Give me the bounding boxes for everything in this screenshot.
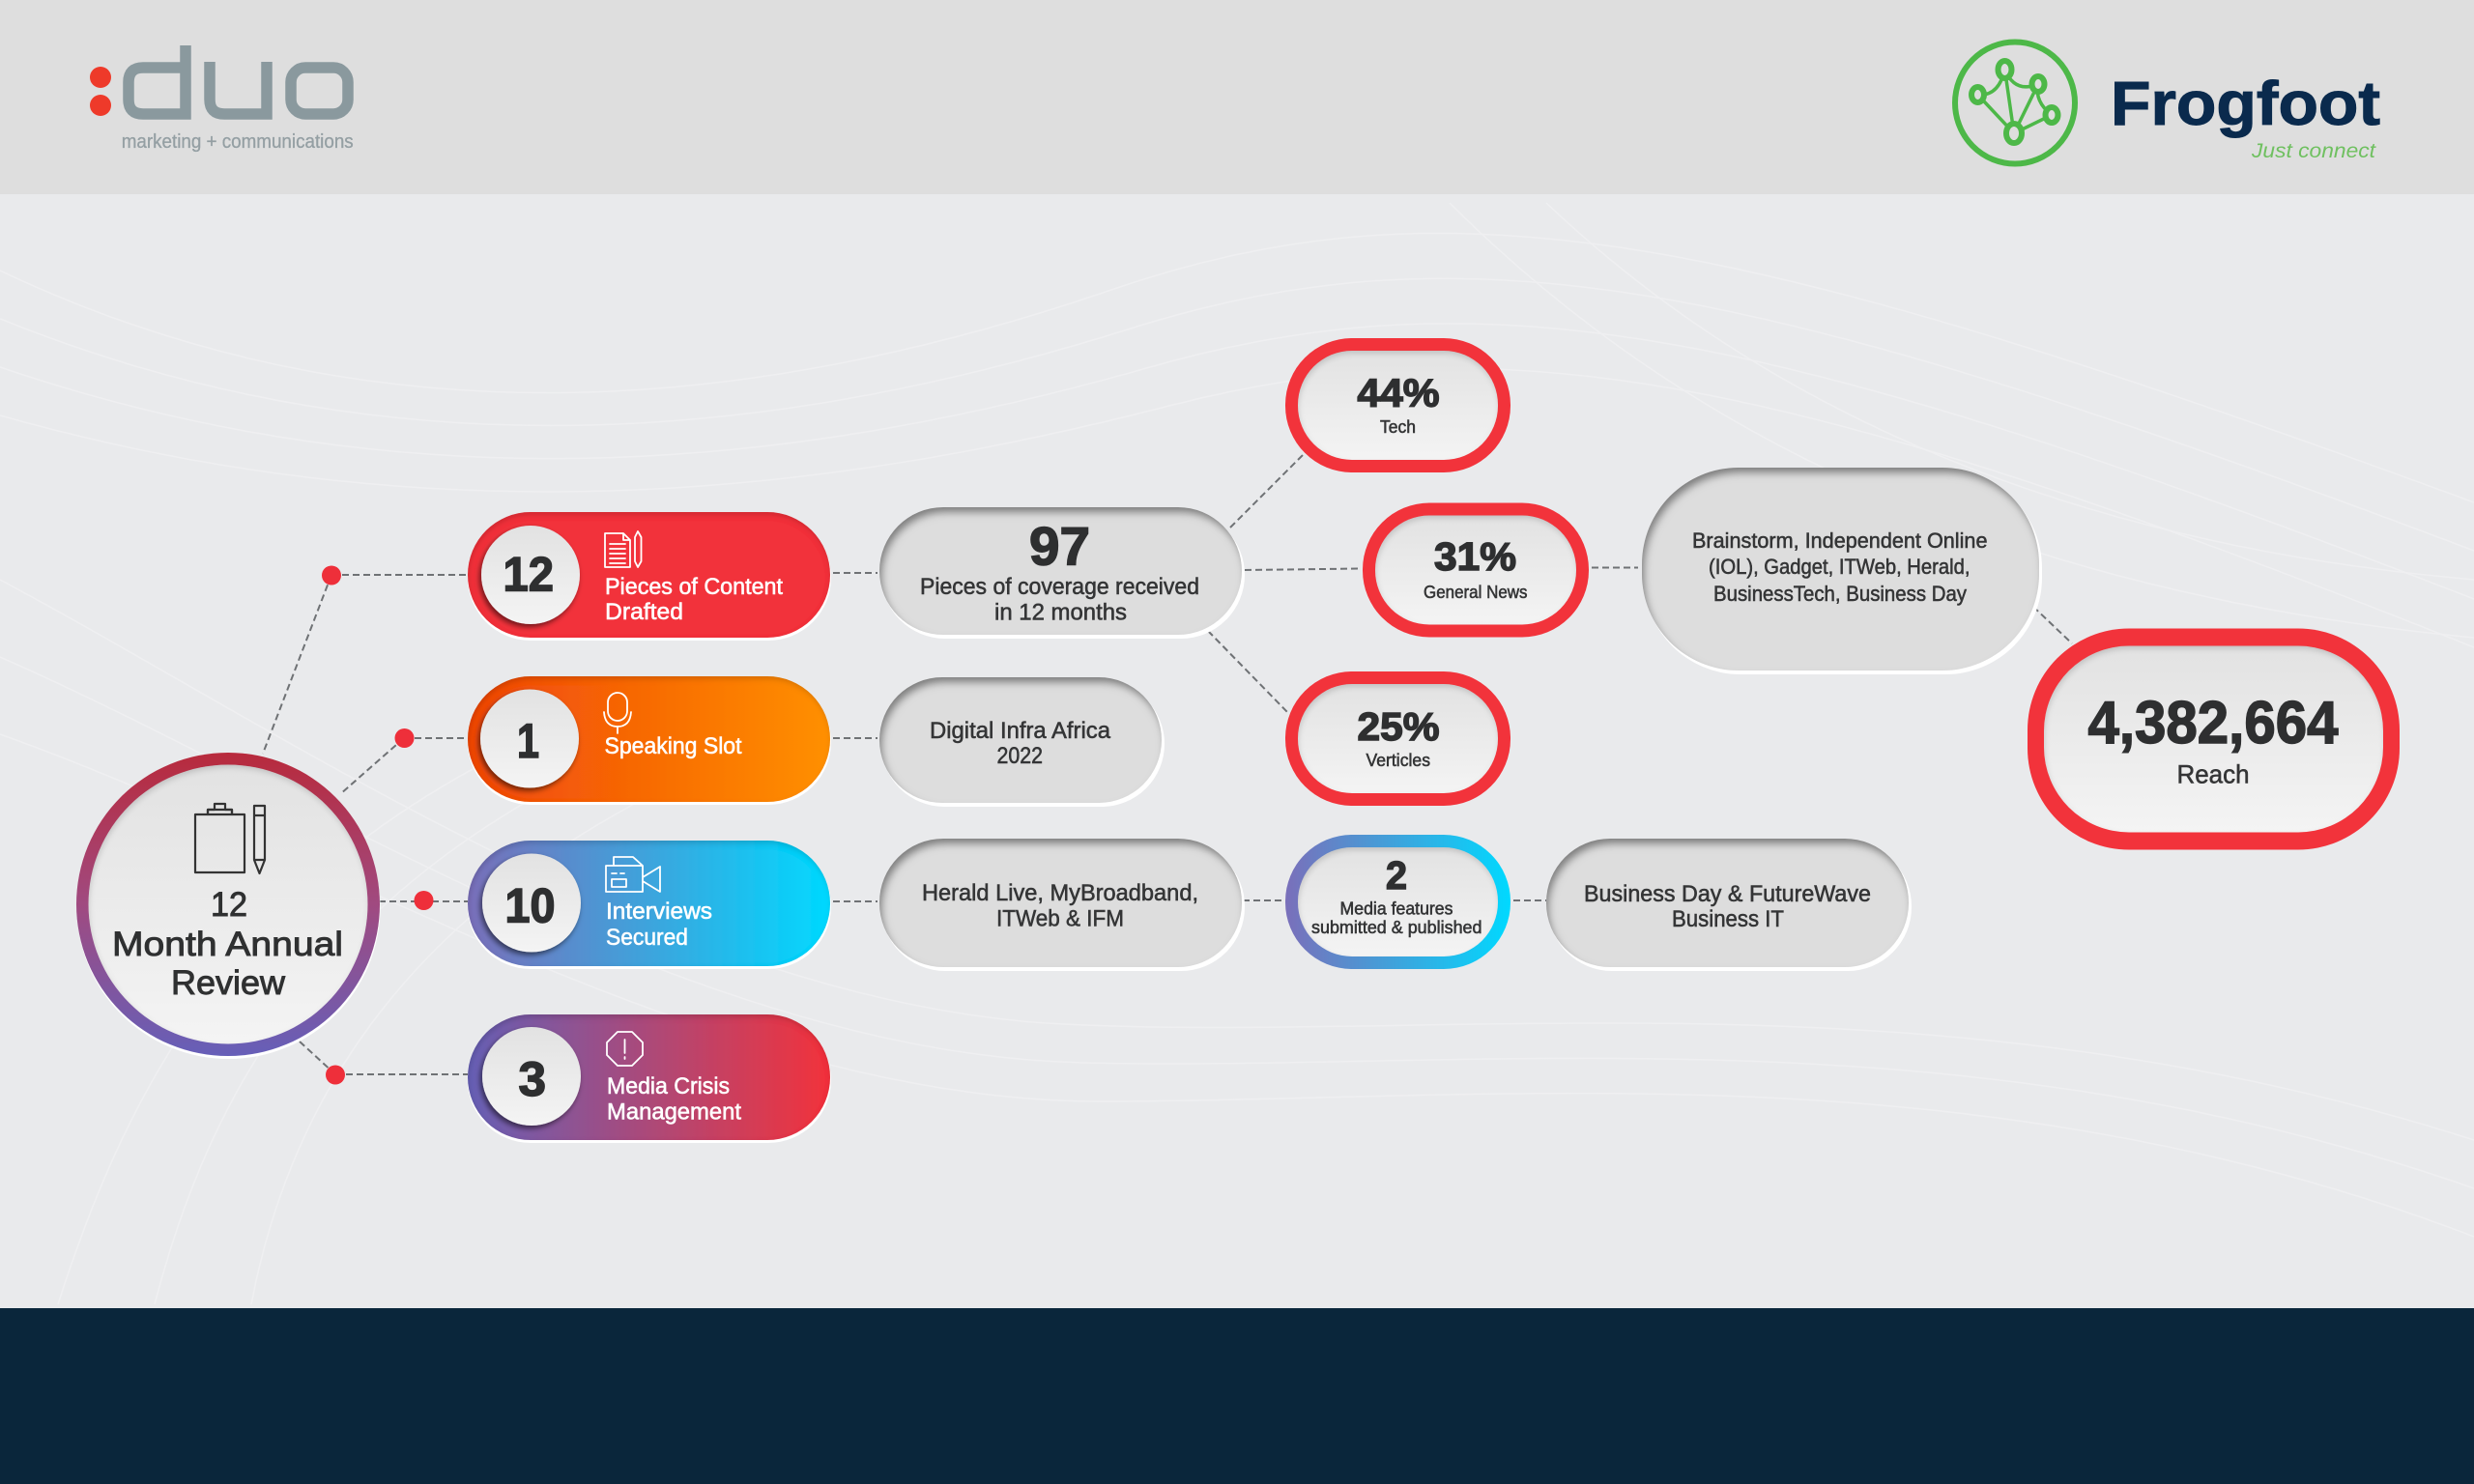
- central circle: 12 Month Annual Review: Review: [171, 964, 286, 1002]
- stat: 25% Verticles: 25%: [1357, 704, 1440, 749]
- panel: 97 pieces of coverage: in 12 months: [994, 599, 1127, 626]
- stat: 44% Tech: Tech: [1380, 417, 1416, 437]
- stat: 25% Verticles: [1285, 671, 1510, 806]
- footer band: [0, 1308, 2474, 1484]
- panel: Business Day and FutureWave: Business Day & FutureWave: [1584, 881, 1871, 907]
- stat: 2 Media features: [1285, 835, 1510, 969]
- pill: 10 Interviews Secured: 10: [504, 879, 555, 933]
- icon: video camera: [606, 857, 660, 892]
- stat: 2 Media features: 2: [1386, 853, 1407, 898]
- pill: 12 Pieces of Content Drafted: [468, 512, 831, 641]
- central circle: 12 Month Annual Review: [76, 753, 381, 1059]
- panel: Digital Infra Africa 2022: Digital Infra Africa: [930, 718, 1111, 744]
- central circle: 12 Month Annual Review: Month Annual: [112, 926, 343, 963]
- stat: 4,382,664 Reach: Reach: [2176, 759, 2250, 788]
- stat: 4,382,664 Reach: 4,382,664: [2087, 690, 2339, 756]
- panel: Digital Infra Africa 2022: 2022: [997, 743, 1043, 769]
- pill: 12 Pieces of Content Drafted: Pieces of Content: [605, 574, 783, 600]
- connector nodes: [322, 566, 433, 1084]
- icon: microphone: [604, 693, 631, 733]
- panel: Herald Live outlets: ITWeb & IFM: [996, 906, 1124, 931]
- pill: 12 Pieces of Content Drafted: Drafted: [605, 599, 683, 625]
- pill: 3 Media Crisis Management: 3: [518, 1052, 546, 1106]
- stat: 31% General News: 31%: [1434, 534, 1516, 579]
- stat: 2 Media features: submitted & published: [1311, 918, 1482, 937]
- panel: general news outlets: BusinessTech, Business Day: [1713, 582, 1967, 606]
- icon: clipboard and pencil: [195, 804, 265, 873]
- pill: 10 Interviews Secured: Interviews: [606, 899, 712, 925]
- pill: 3 Media Crisis Management: [468, 1014, 831, 1143]
- stat: 31% General News: General News: [1424, 583, 1527, 602]
- panel: Digital Infra Africa 2022: [879, 677, 1165, 807]
- panel: general news outlets: (IOL), Gadget, ITWeb, Herald,: [1709, 555, 1970, 579]
- pill: 1 Speaking Slot: 1: [517, 714, 539, 768]
- logo: duo marketing + communications: [90, 45, 354, 153]
- stat: 25% Verticles: Verticles: [1366, 751, 1430, 770]
- stat: 44% Tech: 44%: [1357, 371, 1440, 415]
- pill: 10 Interviews Secured: Secured: [606, 925, 688, 951]
- panel: general news outlets: Brainstorm, Independent Online: [1692, 528, 1987, 553]
- pill: 10 Interviews Secured: [468, 841, 831, 969]
- panel: general news outlets: [1642, 468, 2042, 674]
- icon: document and pencil: [605, 531, 642, 567]
- panel: 97 pieces of coverage: Pieces of coverage received: [920, 574, 1199, 600]
- pill: 1 Speaking Slot: [468, 676, 831, 805]
- pill: 12 Pieces of Content Drafted: 12: [503, 547, 554, 601]
- icon: warning octagon: [607, 1032, 643, 1066]
- stat: 44% Tech: [1285, 338, 1510, 472]
- stat: 31% General News: [1363, 502, 1589, 638]
- panel: Herald Live outlets: Herald Live, MyBroadband,: [922, 880, 1198, 906]
- stat: 2 Media features: Media features: [1339, 899, 1453, 918]
- pill: 1 Speaking Slot: Speaking Slot: [605, 733, 742, 759]
- logo: Frogfoot Just connect: Just connect: [2251, 140, 2376, 162]
- panel: Herald Live outlets: [879, 839, 1245, 971]
- central circle: 12 Month Annual Review: 12: [211, 886, 247, 924]
- pill: 3 Media Crisis Management: Management: [607, 1099, 741, 1125]
- panel: Business Day and FutureWave: [1546, 839, 1912, 971]
- panel: 97 pieces of coverage: [879, 507, 1245, 639]
- logo: Frogfoot Just connect: [1955, 43, 2380, 164]
- stat: 4,382,664 Reach: [2028, 628, 2400, 850]
- pill: 3 Media Crisis Management: Media Crisis: [607, 1073, 730, 1099]
- connector lines: [263, 453, 2072, 1074]
- logo: Frogfoot Just connect: Frogfoot: [2111, 69, 2380, 138]
- logo: duo marketing + communications: marketing + communications: [122, 131, 354, 153]
- panel: Business Day and FutureWave: Business IT: [1672, 906, 1784, 932]
- panel: 97 pieces of coverage: 97: [1029, 516, 1090, 576]
- header band: [0, 0, 2474, 194]
